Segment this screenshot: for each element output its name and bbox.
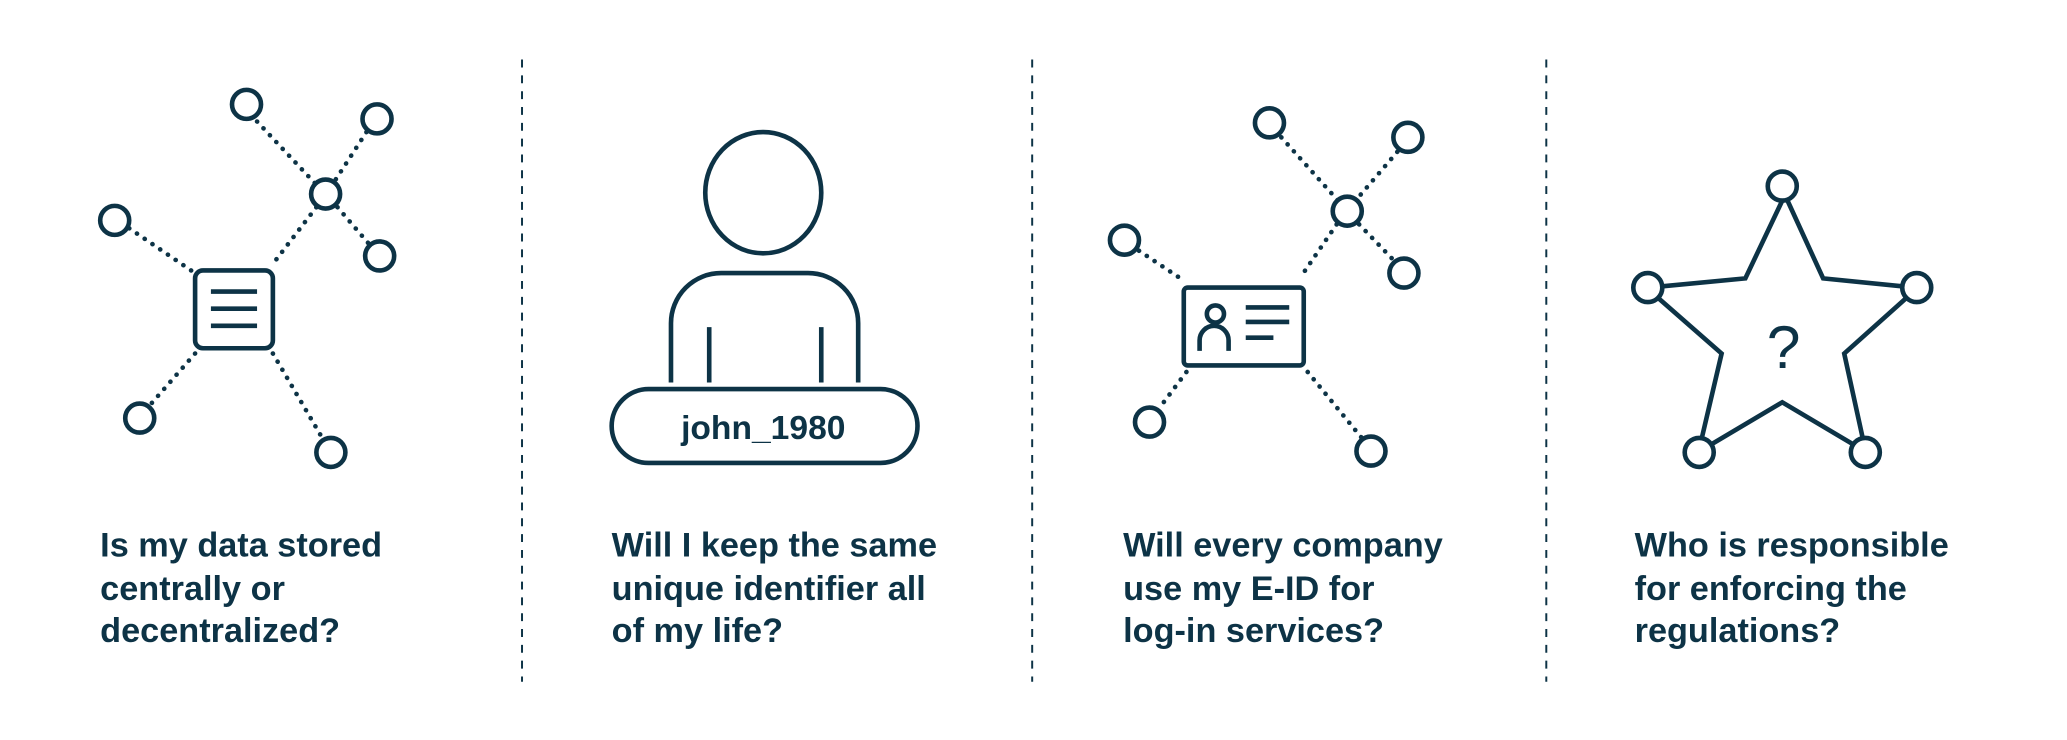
panel: E-ID login xyxy=(1110,108,1443,650)
icon: star with question mark xyxy=(1633,172,1931,467)
text: question 3: log-in services? xyxy=(1123,612,1384,650)
text: question 2: Will I keep the same xyxy=(612,527,937,565)
text: question 4: regulations? xyxy=(1635,612,1840,650)
text: question 1: decentralized? xyxy=(100,612,340,650)
text: question 4: Who is responsible xyxy=(1635,527,1949,565)
text: question 3: Will every company xyxy=(1123,527,1443,565)
panel: regulation enforcement xyxy=(1633,172,1949,650)
panel: data storage xyxy=(100,90,394,650)
icon: network with document xyxy=(100,90,394,467)
icon: person with username xyxy=(612,132,917,463)
text: question 2: unique identifier all xyxy=(612,570,926,608)
text: question 1: centrally or xyxy=(100,570,285,608)
text: question 2: of my life? xyxy=(612,612,783,650)
text: username: john_1980 xyxy=(680,410,845,447)
icon: network with ID card xyxy=(1110,108,1422,466)
panel: unique identifier xyxy=(612,132,937,650)
text: question 3: use my E-ID for xyxy=(1123,570,1374,608)
text: question 4: for enforcing the xyxy=(1635,570,1907,608)
text: question 1: Is my data stored xyxy=(100,527,382,565)
text: question mark: ? xyxy=(1767,313,1800,381)
